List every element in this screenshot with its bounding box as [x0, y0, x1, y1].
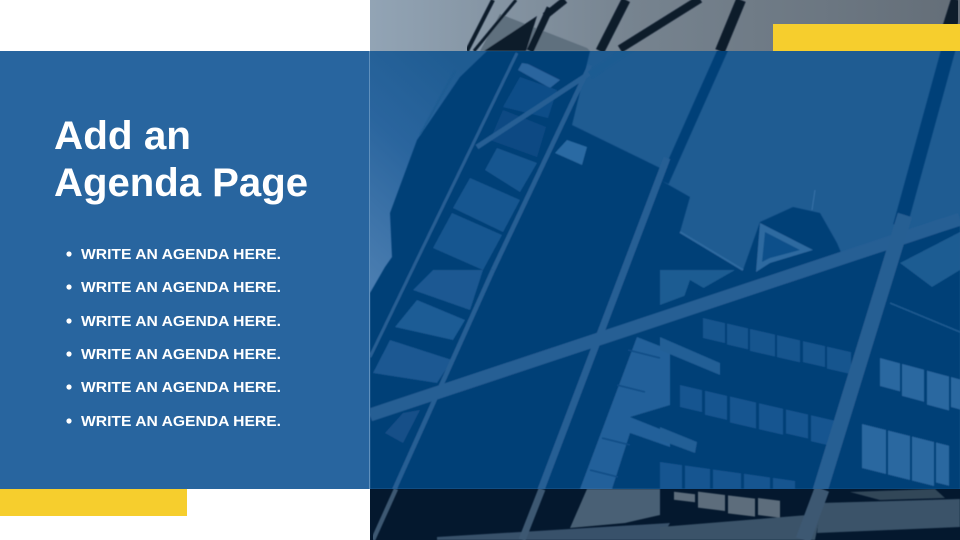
agenda item 5: WRITE AN AGENDA HERE. — [81, 380, 281, 396]
title: Add an — [54, 114, 191, 158]
window row 2 — [680, 385, 837, 447]
photo band: dark bottom strip — [370, 488, 960, 540]
left ladder windows — [373, 63, 587, 443]
title: Agenda Page — [54, 161, 308, 205]
photo band: grey top strip — [370, 0, 960, 51]
yellow accent: top right — [773, 24, 960, 51]
left blue panel — [0, 51, 370, 489]
agenda list — [66, 247, 281, 430]
yellow accent: bottom left — [0, 489, 187, 516]
agenda item 6: WRITE AN AGENDA HERE. — [81, 414, 281, 430]
title — [54, 114, 308, 205]
glass struts — [370, 51, 960, 489]
right ladder column — [580, 337, 670, 489]
thin line right — [890, 303, 960, 332]
upper right light panel — [900, 232, 960, 287]
photo band: blue middle — [370, 51, 960, 489]
agenda item 1: WRITE AN AGENDA HERE. — [81, 247, 281, 263]
window row 1 — [703, 318, 851, 374]
building mass — [370, 51, 960, 489]
dome roof frame — [756, 223, 813, 272]
photo: building reflected in glass — [370, 0, 960, 540]
right window row B — [862, 424, 949, 490]
agenda item 3: WRITE AN AGENDA HERE. — [81, 314, 281, 330]
window row 3 — [660, 462, 796, 489]
right window row A — [880, 358, 960, 414]
agenda item 2: WRITE AN AGENDA HERE. — [81, 280, 281, 296]
panel edge — [369, 51, 370, 489]
agenda item 4: WRITE AN AGENDA HERE. — [81, 347, 281, 363]
